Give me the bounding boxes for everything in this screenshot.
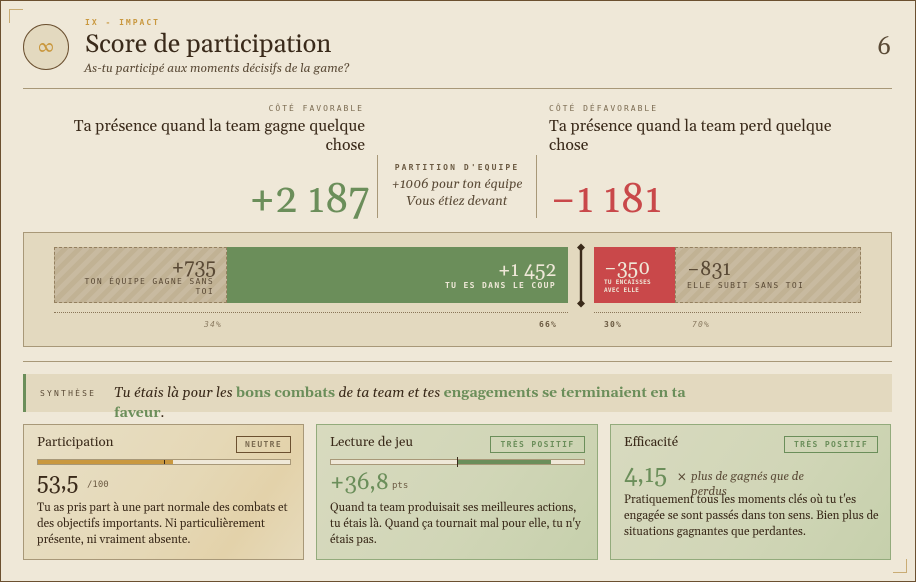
status badge [236, 436, 291, 453]
value: −350 [604, 256, 650, 281]
gauge [37, 459, 291, 465]
partition label: PARTITION D'EQUIPE [395, 163, 519, 172]
unfavorable value: −1 181 [550, 175, 662, 227]
description: Pratiquement tous les moments clés où tu t'es [624, 492, 856, 507]
card: participation [23, 424, 304, 560]
status badge: TRÈS POSITIF [500, 440, 574, 449]
partition column [377, 155, 537, 218]
corner mark top left [9, 9, 23, 23]
score: 53,5 [37, 469, 78, 497]
synthesis band [23, 374, 892, 412]
description: présente, ni vraiment absente. [37, 532, 191, 547]
center divider [577, 244, 585, 308]
bar: you are in the play [227, 247, 568, 303]
percent 34: 34% [204, 320, 222, 329]
caption [604, 279, 651, 294]
description [37, 500, 288, 547]
unfavorable heading: Ta présence quand la team perd quelque [549, 117, 831, 137]
multiplier note: plus de gagnés que de [691, 469, 804, 484]
status badge [784, 436, 878, 453]
caption [84, 276, 214, 296]
bar: she suffers without you [675, 247, 861, 303]
bar: team wins without you [54, 247, 227, 303]
multiplier note [690, 469, 804, 498]
caption: ELLE SUBIT SANS TOI [687, 281, 804, 290]
synthesis label: SYNTHÈSE [40, 389, 96, 398]
header rule [23, 88, 892, 89]
synthesis text: faveur. [114, 404, 164, 422]
partition text: Vous étiez devant [407, 194, 507, 210]
description: Tu as pris part à une part normale des combats et [37, 500, 288, 515]
caption: TOI [196, 287, 214, 296]
card: game reading [316, 424, 598, 560]
section rule [23, 361, 892, 362]
status badge: NEUTRE [245, 440, 282, 449]
section eyebrow: IX - IMPACT [85, 18, 160, 27]
panel: split bars [23, 232, 892, 347]
dotted axis left [54, 312, 568, 313]
score: 4,15 [624, 461, 667, 491]
favorable heading [74, 117, 365, 156]
status badge [490, 436, 585, 453]
value: −831 [687, 257, 731, 282]
percent 30: 30% [604, 320, 622, 329]
card: efficiency [610, 424, 891, 560]
dotted axis right [594, 312, 861, 313]
favorable value: +2 187 [249, 175, 369, 227]
value: +735 [171, 254, 216, 280]
title: Score de participation [85, 28, 331, 61]
score unit: pts [392, 481, 408, 491]
caption: AVEC ELLE [604, 287, 639, 294]
description: des objectifs importants. Ni particulièrement [37, 516, 265, 531]
header icon: infinity [23, 24, 69, 70]
caption: TU ENCAISSES [604, 279, 651, 286]
partition text: +1006 pour ton équipe [391, 177, 523, 193]
bar: you take it with her [594, 247, 675, 303]
description: situations gagnantes que perdantes. [624, 524, 806, 539]
multiplier sign: × [677, 468, 687, 487]
favorable label: CÔTÉ FAVORABLE [269, 104, 364, 113]
value: +1 452 [498, 258, 556, 283]
card title: Efficacité [624, 434, 678, 451]
description: étais pas. [330, 532, 377, 547]
caption: TU ES DANS LE COUP [445, 281, 556, 290]
description: Quand ta team produisait ses meilleures actions, [330, 500, 576, 515]
corner mark bottom right [893, 559, 907, 573]
header icon: infinity: ∞ [39, 34, 53, 60]
synthesis text [114, 384, 686, 422]
description: tu étais là. Quand ça tournait mal pour elle, tu n'y [330, 516, 581, 531]
description [330, 500, 581, 547]
unfavorable column [549, 104, 831, 227]
favorable heading: Ta présence quand la team gagne quelque [74, 117, 365, 137]
multiplier note: perdus [691, 484, 727, 498]
gauge [330, 459, 585, 465]
synthesis text: Tu étais là pour les bons combats de ta team et tes engagements se terminaient en ta [114, 384, 686, 402]
unfavorable heading [549, 117, 831, 156]
description: engagée se sont passés dans ton sens. Bien plus de [624, 508, 879, 523]
caption: TON ÉQUIPE GAGNE SANS [84, 277, 214, 286]
description [624, 492, 879, 539]
percent 70: 70% [692, 320, 710, 329]
card title: Lecture de jeu [330, 434, 413, 451]
unfavorable label: CÔTÉ DÉFAVORABLE [549, 104, 658, 113]
unfavorable heading: chose [549, 136, 588, 156]
favorable heading: chose [326, 136, 365, 156]
subtitle: As-tu participé aux moments décisifs de la game? [84, 62, 349, 77]
score: +36,8 [330, 468, 389, 497]
status badge: TRÈS POSITIF [794, 440, 868, 449]
percent 66: 66% [539, 320, 557, 329]
partition text [391, 177, 523, 210]
page number: 6 [877, 33, 891, 63]
favorable column [74, 104, 369, 227]
score unit: /100 [87, 480, 109, 490]
card title: Participation [37, 434, 113, 451]
